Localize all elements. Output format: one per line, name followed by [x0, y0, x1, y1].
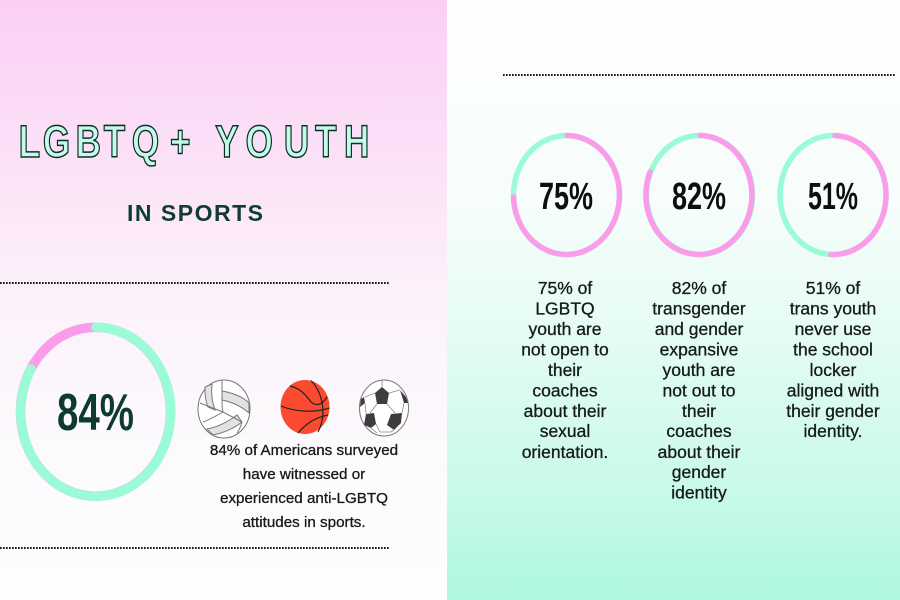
- donut chart: 51%: [780, 136, 886, 255]
- text block: 82% description: transgender: [652, 298, 746, 318]
- panel: left background: [0, 0, 447, 600]
- text block: 82% description: coaches: [666, 421, 732, 441]
- donut chart: 51%: 51%: [808, 176, 858, 218]
- donut chart: 82%: 82%: [672, 176, 726, 218]
- icon: soccer ball: [360, 380, 408, 436]
- divider: top right: [503, 74, 895, 76]
- text block: 51% description: 51% of: [806, 278, 860, 298]
- text block: 51% description: aligned with: [787, 380, 879, 400]
- text block: 75% description: not open to: [521, 340, 609, 360]
- icon: volleyball: [198, 380, 250, 438]
- panel: right background: [447, 0, 900, 600]
- title: LGBTQ+ YOUTH: [19, 116, 369, 167]
- text block: 75% description: their: [548, 360, 582, 380]
- text block: 84% description: have witnessed or: [243, 466, 365, 483]
- text block: 75% description: LGBTQ: [535, 298, 595, 318]
- text block: 82% description: not out to: [663, 380, 735, 400]
- donut chart: 75%: [514, 136, 620, 254]
- text block: 82% description: expansive: [660, 340, 738, 360]
- text block: 82% description: and gender: [655, 319, 743, 339]
- text block: 51% description: [786, 278, 880, 441]
- text block: 82% description: identity: [671, 482, 727, 502]
- text block: 75% description: about their: [524, 401, 607, 421]
- text block: 82% description: gender: [672, 462, 726, 482]
- text block: 84% description: 84% of Americans surveyed: [210, 442, 398, 459]
- donut chart: 84%: [20, 327, 171, 496]
- text block: 75% description: 75% of: [538, 278, 592, 298]
- text block: 51% description: identity.: [803, 421, 863, 441]
- text block: 82% description: 82% of: [672, 278, 726, 298]
- donut chart: 82%: [646, 136, 752, 254]
- subtitle: IN SPORTS: [127, 200, 263, 226]
- text block: 75% description: coaches: [532, 380, 598, 400]
- text block: 75% description: sexual: [540, 421, 590, 441]
- donut chart: 75%: 75%: [539, 176, 593, 218]
- text block: 51% description: locker: [810, 360, 857, 380]
- icon: basketball: [280, 380, 330, 434]
- text block: 84% description: attitudes in sports.: [242, 514, 366, 531]
- text block: 84% description: [210, 442, 398, 531]
- text block: 51% description: trans youth: [790, 298, 876, 318]
- text block: 51% description: never use: [795, 319, 871, 339]
- text block: 51% description: their gender: [786, 401, 880, 421]
- text block: 84% description: experienced anti-LGBTQ: [220, 490, 388, 507]
- text block: 82% description: their: [682, 401, 716, 421]
- divider: bottom left: [0, 547, 390, 549]
- text block: 75% description: youth are: [529, 319, 601, 339]
- text block: 51% description: the school: [793, 340, 873, 360]
- text block: 75% description: orientation.: [522, 442, 608, 462]
- text block: 82% description: youth are: [663, 360, 735, 380]
- text block: 82% description: about their: [658, 442, 741, 462]
- text block: 75% description: [521, 278, 609, 462]
- text block: 82% description: [652, 278, 746, 502]
- donut chart: 84%: 84%: [57, 384, 134, 442]
- divider: under heading: [0, 282, 390, 284]
